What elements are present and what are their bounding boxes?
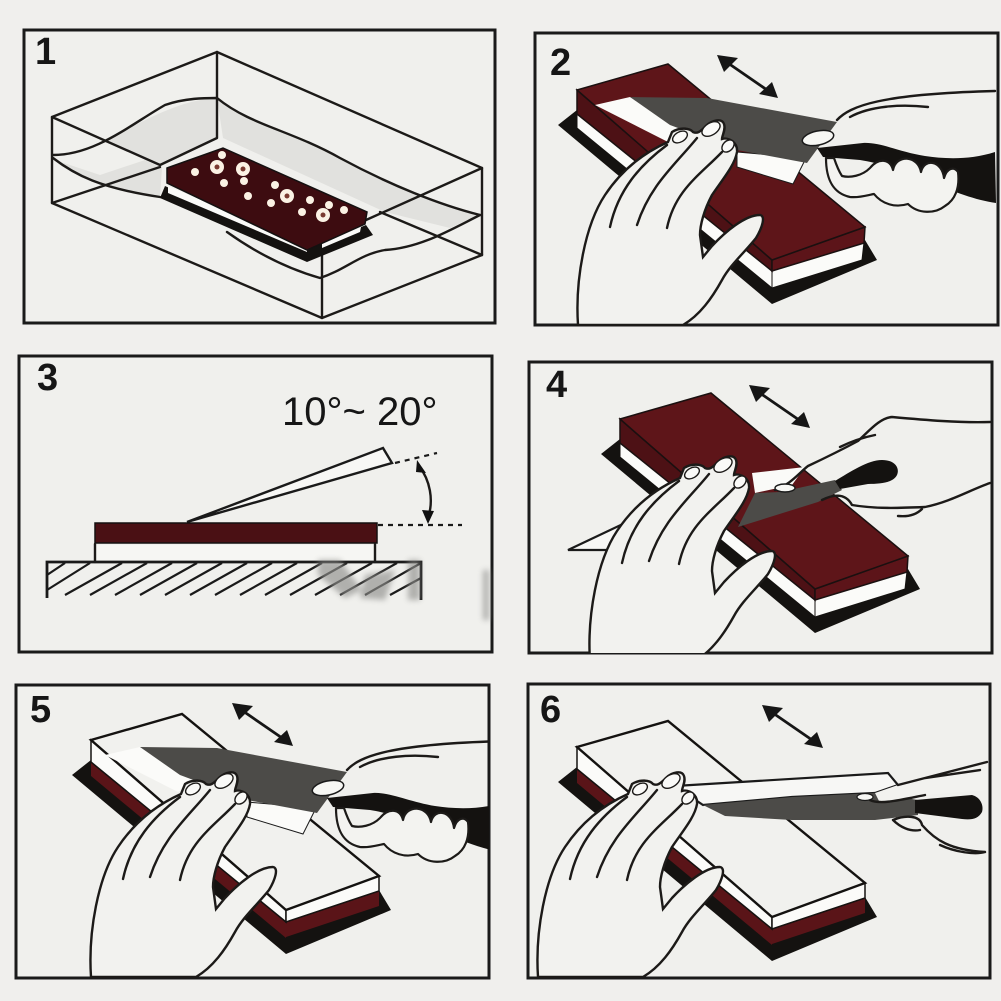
step number 2: 2 xyxy=(550,42,571,84)
angle label: 10°~ 20° xyxy=(282,390,437,434)
panel 2: sharpen blade on red stone xyxy=(535,33,998,325)
white whetstone xyxy=(558,721,877,961)
panel 4: sharpen reverse side on red stone xyxy=(529,362,992,661)
knife and right hand xyxy=(568,417,990,550)
double arrow xyxy=(749,385,810,428)
hatched table surface xyxy=(47,562,421,600)
step number 4: 4 xyxy=(546,364,567,406)
left hand xyxy=(90,771,276,977)
red whetstone xyxy=(601,393,920,633)
panel 5: sharpen blade on white stone xyxy=(16,685,506,978)
double arrow xyxy=(232,703,293,746)
step number 3: 3 xyxy=(37,357,58,399)
red whetstone xyxy=(558,64,877,304)
angle guide lines and arc arrow xyxy=(378,453,462,525)
blurred watermark smudge xyxy=(318,560,489,620)
left hand xyxy=(537,771,723,977)
left hand xyxy=(577,119,763,325)
dotted whetstone in water xyxy=(160,148,373,262)
double arrow xyxy=(717,55,778,98)
water tank wireframe xyxy=(52,52,482,318)
double arrow xyxy=(762,705,823,748)
left hand xyxy=(589,455,775,661)
knife at angle xyxy=(187,448,392,522)
step number 1: 1 xyxy=(35,31,56,73)
knife and right hand xyxy=(105,741,506,862)
step number 5: 5 xyxy=(30,689,51,731)
stone profile xyxy=(95,523,377,562)
panel 6: finish with knife nearly flat xyxy=(528,684,990,978)
step number 6: 6 xyxy=(540,689,561,731)
knife and right hand xyxy=(675,762,987,853)
panel 1: soak stone in water xyxy=(24,30,495,323)
white whetstone xyxy=(72,714,391,954)
panel 3: sharpening angle diagram xyxy=(19,356,492,652)
knife and right hand xyxy=(595,91,996,212)
